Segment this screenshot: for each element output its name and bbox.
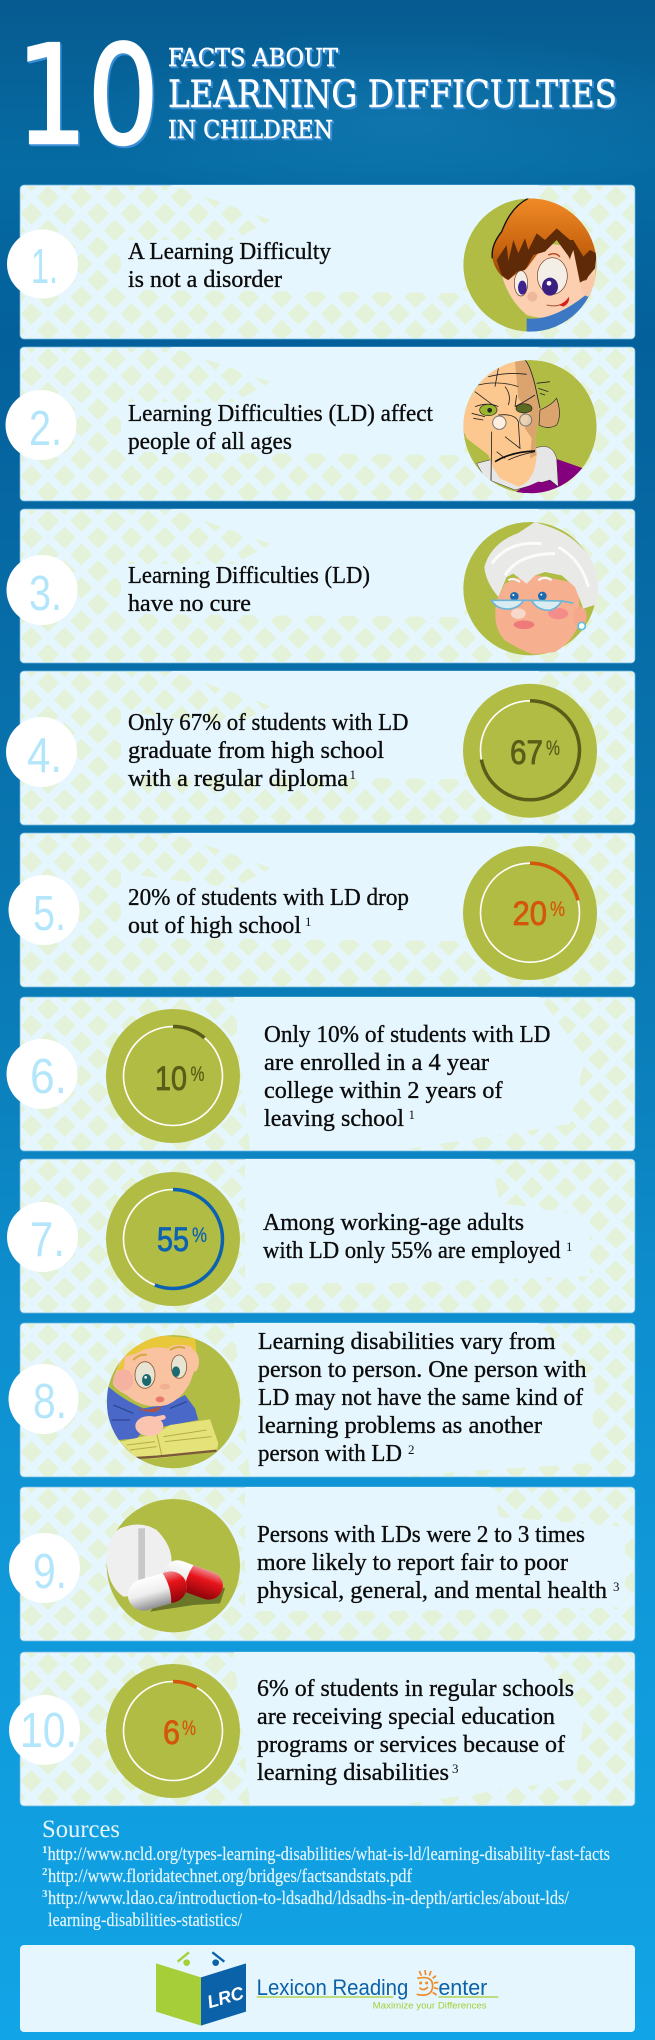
number badge 7 <box>7 1202 78 1272</box>
source 1: 1 <box>42 1844 48 1856</box>
text: fact 10: programs or services because of <box>257 1732 565 1758</box>
chart: 10 percent ring: 10 <box>155 1060 187 1098</box>
big number 10: 10 <box>16 16 159 176</box>
logo wordmark end: enter <box>438 1975 487 2000</box>
text: fact 9: Persons with LDs were 2 to 3 times <box>257 1522 585 1548</box>
text: fact 2: people of all ages <box>128 429 292 455</box>
chart: 10 percent ring <box>106 1009 240 1143</box>
icon: boy with orange hair <box>463 197 598 337</box>
panel: fact 1 <box>7 185 635 339</box>
background glow <box>40 30 655 210</box>
number badge 6: 6. <box>30 1050 67 1104</box>
chart: 67 percent ring: % <box>546 737 560 760</box>
logo wordmark: Lexicon Reading <box>257 1975 408 2000</box>
logo tagline: Maximize your Differences <box>373 2000 487 2010</box>
number badge 3: 3. <box>29 567 62 621</box>
number badge 10: 10. <box>20 1704 77 1758</box>
logo: Lexicon Reading Center <box>156 1952 498 2026</box>
number badge 9: 9. <box>33 1545 67 1599</box>
source 2: 2 <box>42 1866 48 1878</box>
panel: fact 3 <box>6 509 635 663</box>
icon: open book <box>156 1952 247 2026</box>
number badge 9 <box>9 1533 80 1603</box>
icon: open book: LRC <box>205 1982 247 2012</box>
number badge 5 <box>8 875 80 945</box>
text: fact 10: 6% of students in regular schools <box>257 1676 574 1702</box>
number badge 2: 2. <box>29 402 62 456</box>
text: fact 4 <box>128 710 408 792</box>
text: fact 8: Learning disabilities vary from <box>258 1329 556 1355</box>
title line: in children: IN CHILDREN <box>168 116 333 144</box>
chart: 20 percent ring <box>463 846 597 980</box>
sources <box>42 1816 610 1931</box>
number badge 5: 5. <box>33 887 66 941</box>
chart: 6 percent ring: % <box>182 1717 196 1740</box>
text: fact 2 <box>128 401 433 455</box>
panel: fact 4 <box>6 671 635 825</box>
number badge 8 <box>8 1364 78 1434</box>
text: fact 4: graduate from high school <box>128 738 384 764</box>
chart: 10 percent ring: % <box>190 1063 204 1086</box>
text: fact 8: person with LD <box>258 1441 402 1467</box>
text: fact 4: 1 <box>350 767 356 782</box>
text: fact 6: 1 <box>408 1107 415 1122</box>
text: fact 1: A Learning Difficulty <box>128 239 331 265</box>
text: fact 5: 20% of students with LD drop <box>128 885 409 911</box>
text: fact 3 <box>128 563 370 617</box>
text: fact 10 <box>257 1676 574 1786</box>
text: fact 10: 3 <box>452 1761 458 1776</box>
chart: 20 percent ring: 20 <box>512 895 547 933</box>
sources heading: Sources <box>42 1816 120 1843</box>
source 3: learning-disabilities-statistics/ <box>48 1911 243 1931</box>
number badge 8: 8. <box>33 1375 67 1429</box>
chart: 6 percent ring <box>106 1664 240 1798</box>
title line: facts about: FACTS ABOUT <box>168 44 338 72</box>
text: fact 3: have no cure <box>128 591 251 617</box>
panel: fact 9 <box>9 1487 635 1641</box>
text: fact 6: Only 10% of students with LD <box>264 1022 550 1048</box>
text: fact 6 <box>264 1022 550 1132</box>
panel: fact 5 <box>8 833 635 987</box>
source 3: 3 <box>42 1888 48 1900</box>
number badge 6 <box>6 1039 78 1109</box>
chart: 67 percent ring: 67 <box>510 734 543 772</box>
number badge 2 <box>6 390 76 460</box>
source 2: http://www.floridatechnet.org/bridges/factsandstats.pdf <box>48 1867 413 1887</box>
panel: fact 7 <box>7 1159 635 1313</box>
number badge 4: 4. <box>27 729 62 783</box>
panel: fact 2 <box>6 347 635 501</box>
chart: 55 percent ring: 55 <box>157 1221 189 1259</box>
text: fact 8: person to person. One person with <box>258 1357 586 1383</box>
text: fact 10: learning disabilities <box>257 1760 449 1786</box>
icon: old lady with glasses <box>463 522 598 655</box>
text: fact 3: Learning Difficulties (LD) <box>128 563 370 589</box>
text: fact 9: more likely to report fair to poor <box>257 1550 568 1576</box>
text: fact 9 <box>257 1522 620 1604</box>
panel: fact 8 <box>8 1323 635 1477</box>
text: fact 5: 1 <box>305 914 312 929</box>
title <box>16 16 617 176</box>
text: fact 10: are receiving special education <box>257 1704 555 1730</box>
text: fact 7 <box>263 1210 572 1264</box>
icon: smiling sun <box>417 1970 438 1995</box>
text: fact 1: is not a disorder <box>128 267 282 293</box>
number badge 4 <box>6 717 77 787</box>
text: fact 8 <box>258 1329 586 1467</box>
number badge 1: 1. <box>31 240 58 294</box>
text: fact 8: learning problems as another <box>258 1413 542 1439</box>
chart: 67 percent ring <box>463 684 597 818</box>
text: fact 9: 3 <box>613 1579 620 1594</box>
panel: fact 10 <box>9 1652 635 1806</box>
text: fact 8: LD may not have the same kind of <box>258 1385 583 1411</box>
number badge 3 <box>6 555 78 625</box>
text: fact 6: are enrolled in a 4 year <box>264 1050 489 1076</box>
text: fact 5: out of high school <box>128 913 301 939</box>
text: fact 7: with LD only 55% are employed <box>263 1238 560 1264</box>
icon: pills and capsules <box>107 1499 240 1632</box>
text: fact 4: Only 67% of students with LD <box>128 710 408 736</box>
text: fact 4: with a regular diploma <box>128 766 348 792</box>
chart: 6 percent ring: 6 <box>163 1714 180 1752</box>
text: fact 2: Learning Difficulties (LD) affect <box>128 401 433 427</box>
text: fact 6: college within 2 years of <box>264 1078 502 1104</box>
panel: logo <box>20 1945 635 2032</box>
icon: grumpy old man <box>462 360 597 495</box>
chart: 55 percent ring: % <box>192 1224 207 1247</box>
chart: 55 percent ring <box>106 1172 240 1306</box>
text: fact 1 <box>128 239 331 293</box>
number badge 10 <box>9 1695 80 1765</box>
text: fact 7: Among working-age adults <box>263 1210 524 1236</box>
text: fact 5 <box>128 885 409 939</box>
panel: fact 6 <box>6 997 635 1151</box>
number badge 1 <box>7 230 78 298</box>
source 3: http://www.ldao.ca/introduction-to-ldsadhd/ldsadhs-in-depth/articles/about-lds/ <box>48 1889 570 1909</box>
icon: child reading a book <box>107 1335 240 1468</box>
source 3 <box>42 1888 570 1931</box>
text: fact 9: physical, general, and mental health <box>257 1578 607 1604</box>
text: fact 6: leaving school <box>264 1106 404 1132</box>
chart: 20 percent ring: % <box>550 898 565 921</box>
number badge 7: 7. <box>30 1213 65 1267</box>
text: fact 7: 1 <box>566 1239 572 1254</box>
text: fact 8: 2 <box>408 1442 414 1457</box>
